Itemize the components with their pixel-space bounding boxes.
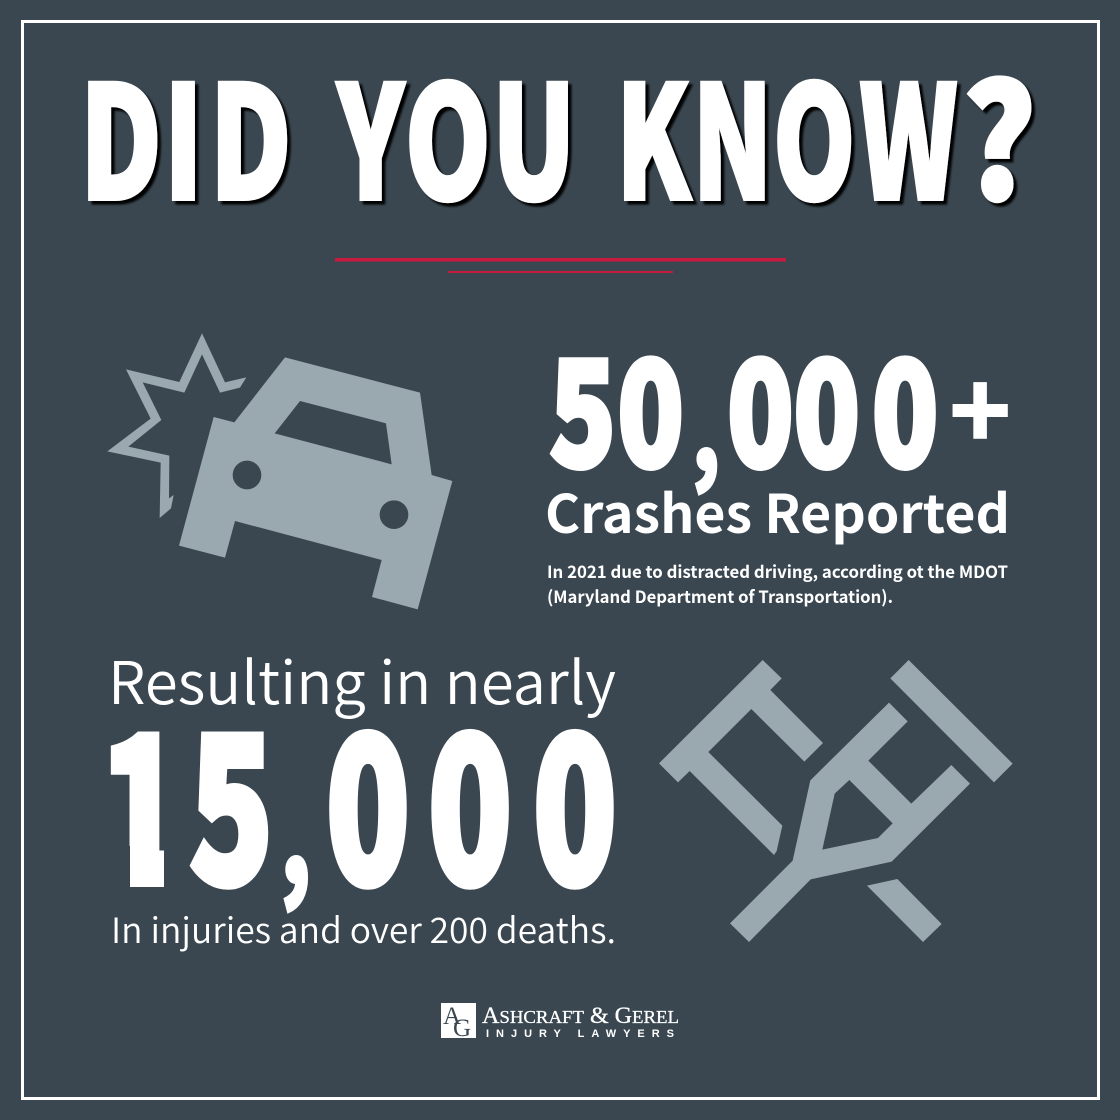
red divider lines	[335, 258, 786, 273]
logo mark	[441, 1003, 476, 1042]
logo	[441, 1003, 679, 1042]
title: KNOW	[616, 19, 957, 245]
stat: 50,000+: 000	[728, 303, 938, 508]
title: ?	[963, 20, 1036, 245]
stat: 15,000: ,	[281, 737, 311, 919]
text block: crash source: In 2021 due to distracted driving, according ot the MDOT	[547, 558, 1008, 583]
heading: crashes reported: Crashes Reported	[545, 473, 1010, 549]
logo mark: G	[453, 1015, 471, 1042]
stat: 15,000: 000	[326, 654, 617, 940]
stat: 50,000+: 50	[550, 303, 684, 508]
icon: crashed car	[107, 333, 452, 609]
stat: 50,000+: ,	[692, 348, 720, 500]
logo mark: A	[443, 1003, 461, 1030]
logo wordmark: ASHCRAFT & GEREL	[482, 1003, 679, 1028]
text block: crash source: (Maryland Department of Transportation).	[547, 583, 893, 608]
logo tagline: INJURY LAWYERS	[486, 1028, 674, 1040]
title: YOU	[336, 18, 575, 244]
stat: 50,000+: +	[948, 329, 1012, 480]
text: resulting in nearly: Resulting in nearly	[108, 636, 616, 721]
text: injuries and deaths: In injuries and over 200 deaths.	[111, 903, 616, 954]
icon: crossed crutches	[659, 660, 1013, 942]
stat: 50,000+	[550, 303, 1012, 508]
title: DID	[80, 19, 292, 245]
stat: 15,000	[90, 654, 617, 940]
title	[80, 18, 1036, 245]
stat: 15,000: 15	[100, 654, 273, 940]
text block: crash source	[547, 558, 1008, 608]
